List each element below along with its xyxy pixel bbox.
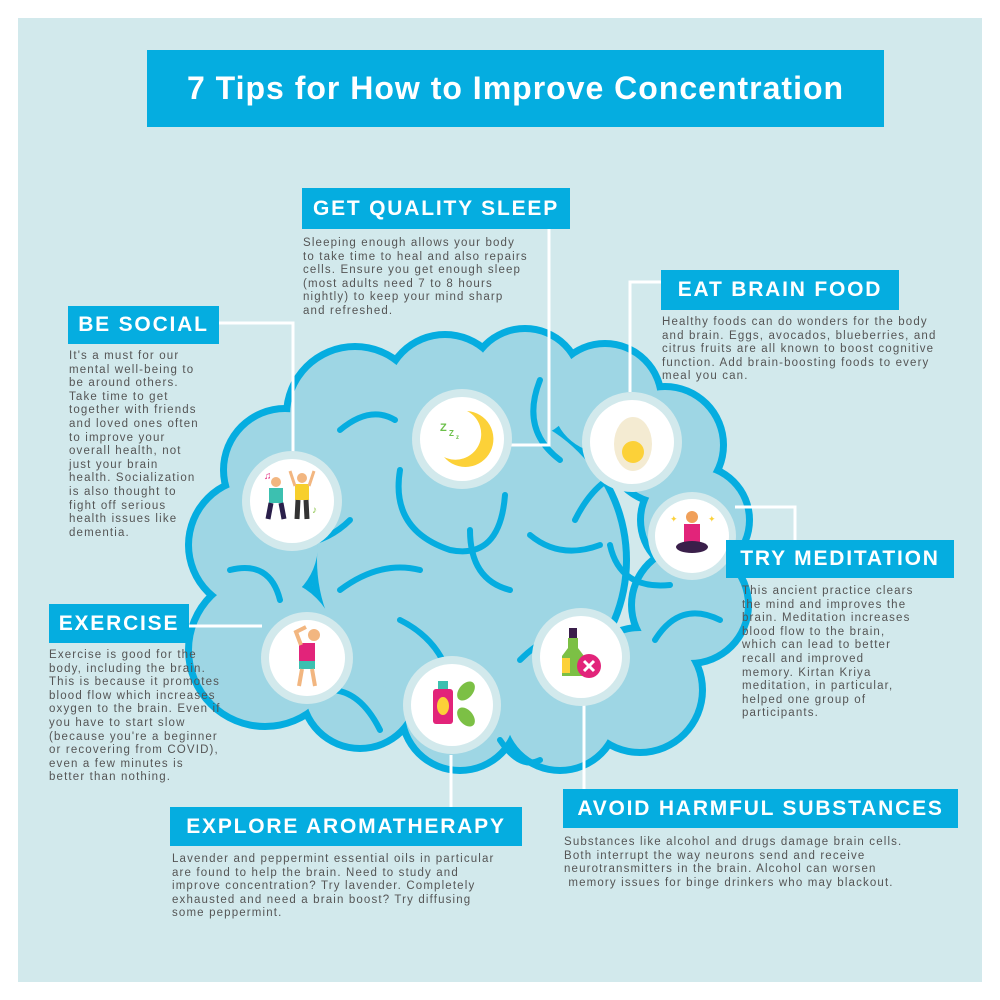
text: substances: neurotransmitters in the brain. Alcohol can worsen (564, 863, 877, 875)
label: get quality sleep (302, 188, 570, 229)
text: brain food: citrus fruits are all known to boost cognitive (662, 343, 934, 355)
icon: moon sleep (412, 389, 512, 489)
text: aromatherapy: improve concentration? Try lavender. Completely (172, 880, 475, 892)
text: exercise: blood flow which increases (49, 690, 216, 702)
text: social: dementia. (69, 527, 130, 539)
text: exercise: better than nothing. (49, 771, 171, 783)
text: meditation: This ancient practice clears (742, 585, 914, 597)
icon: moon sleep: Z (440, 422, 447, 434)
text: meditation (742, 585, 914, 719)
text: meditation: participants. (742, 707, 819, 719)
icon: dancing friends: ♪ (312, 505, 317, 516)
text: meditation: helped one group of (742, 694, 866, 706)
text: substances (564, 836, 902, 889)
icon: moon sleep: Z (449, 429, 454, 438)
label: avoid harmful substances: AVOID HARMFUL SUBSTANCES (577, 796, 944, 820)
text: meditation: which can lead to better (742, 639, 891, 651)
text: aromatherapy: are found to help the brain. Need to study and (172, 867, 459, 879)
icon: alcohol bottle (532, 608, 630, 706)
text: social: Take time to get (69, 391, 169, 403)
label: explore aromatherapy: EXPLORE AROMATHERAPY (186, 814, 506, 838)
text: social: to improve your (69, 432, 166, 444)
text: social: health issues like (69, 513, 177, 525)
label: exercise: EXERCISE (59, 612, 179, 634)
icon: dancing friends: ♫ (264, 471, 272, 482)
text: meditation: meditation, in particular, (742, 680, 893, 692)
text: social: is also thought to (69, 486, 177, 498)
text: social: be around others. (69, 377, 179, 389)
text: exercise: even a few minutes is (49, 758, 184, 770)
text: brain food: Healthy foods can do wonders for the body (662, 316, 928, 328)
label: try meditation: TRY MEDITATION (740, 547, 940, 570)
text: brain food: function. Add brain-boosting foods to every (662, 357, 929, 369)
icon: aromatherapy (403, 656, 501, 754)
text: sleep: nightly) to keep your mind sharp (303, 291, 503, 303)
text: sleep: Sleeping enough allows your body (303, 237, 515, 249)
text: exercise: body, including the brain. (49, 663, 206, 675)
text: sleep: to take time to heal and also repairs (303, 251, 528, 263)
text: meditation: recall and improved (742, 653, 864, 665)
text: exercise: or recovering from COVID), (49, 744, 219, 756)
text: brain food: and brain. Eggs, avocados, blueberries, and (662, 330, 936, 342)
title: 7 Tips for How to Improve Concentration (187, 70, 844, 106)
label: try meditation (726, 540, 954, 578)
text: substances: Both interrupt the way neurons send and receive (564, 850, 865, 862)
text: exercise: oxygen to the brain. Even if (49, 703, 221, 715)
text: aromatherapy: some peppermint. (172, 907, 282, 919)
text: social: overall health, not (69, 445, 182, 457)
text: aromatherapy (172, 853, 495, 919)
text: sleep: cells. Ensure you get enough sleep (303, 264, 521, 276)
label: be social: BE SOCIAL (78, 313, 209, 336)
text: substances: memory issues for binge drinkers who may blackout. (568, 877, 894, 889)
text: social: mental well-being to (69, 364, 194, 376)
text: meditation: the mind and improves the (742, 599, 906, 611)
text: brain food: meal you can. (662, 370, 749, 382)
text: sleep (303, 237, 528, 317)
icon: moon sleep: z (456, 435, 459, 441)
text: social: It's a must for our (69, 350, 179, 362)
text: aromatherapy: Lavender and peppermint essential oils in particular (172, 853, 495, 865)
icon: exercise (261, 612, 353, 704)
text: social: fight off serious (69, 500, 166, 512)
text: exercise: you have to start slow (49, 717, 186, 729)
text: social: together with friends (69, 404, 197, 416)
icon: meditation: ✦ (670, 514, 678, 524)
text: exercise: Exercise is good for the (49, 649, 197, 661)
text: sleep: (most adults need 7 to 8 hours (303, 278, 493, 290)
text: social (68, 350, 199, 539)
text: meditation: brain. Meditation increases (742, 612, 910, 624)
text: social: health. Socialization (69, 472, 195, 484)
text: exercise: This is because it promotes (49, 676, 220, 688)
text: aromatherapy: exhausted and need a brain boost? Try diffusing (172, 894, 471, 906)
text: brain food (662, 316, 936, 382)
icon: egg (582, 392, 682, 492)
icon: meditation: ✦ (708, 514, 716, 524)
label: eat brain food: EAT BRAIN FOOD (678, 278, 882, 301)
text: exercise: (because you're a beginner (49, 731, 218, 743)
text: exercise (49, 649, 221, 783)
text: meditation: memory. Kirtan Kriya (742, 667, 872, 679)
label: get quality sleep: GET QUALITY SLEEP (313, 196, 559, 220)
title (147, 50, 884, 127)
text: meditation: blood flow to the brain, (742, 626, 885, 638)
text: sleep: and refreshed. (303, 305, 393, 317)
icon: meditation (648, 492, 736, 580)
text: substances: Substances like alcohol and drugs damage brain cells. (564, 836, 902, 848)
connector lines (189, 229, 795, 807)
label: avoid harmful substances (563, 789, 958, 828)
icon: dancing friends (242, 451, 342, 551)
label: be social (68, 306, 219, 344)
label: exercise (49, 604, 189, 643)
text: social: and loved ones often (69, 418, 199, 430)
label: explore aromatherapy (170, 807, 522, 846)
text: social: just your brain (69, 459, 158, 471)
label: eat brain food (661, 270, 899, 310)
